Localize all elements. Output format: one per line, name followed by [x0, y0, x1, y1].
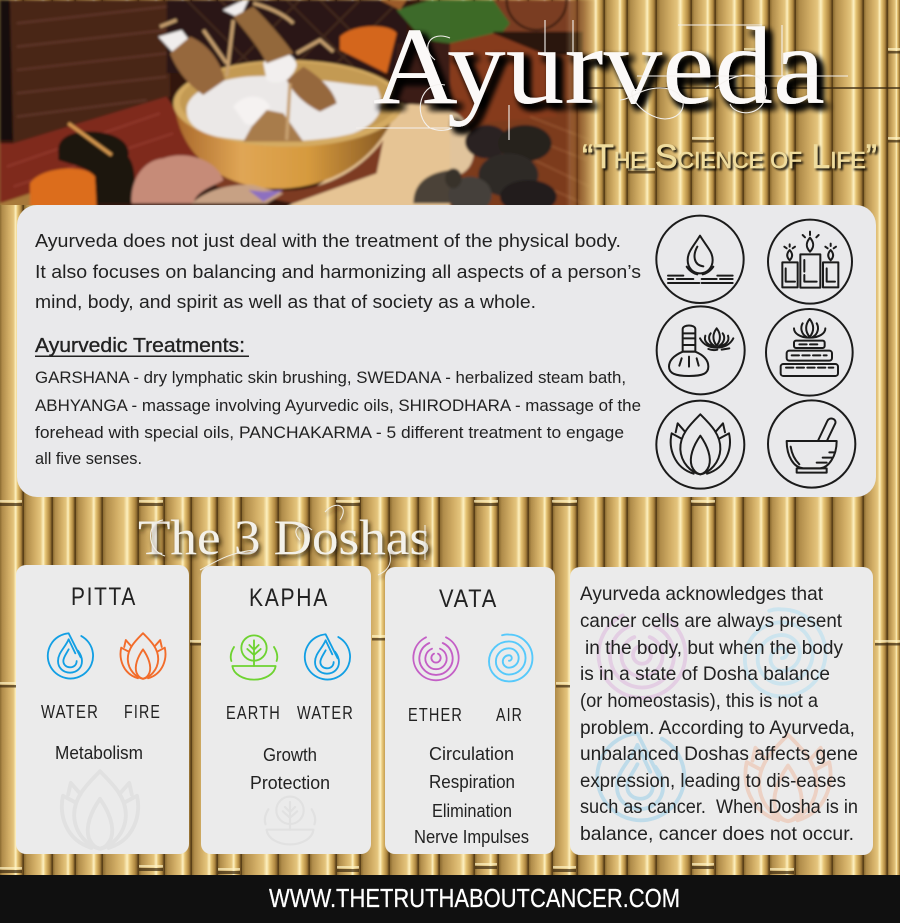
- element labels: FIRE: [124, 701, 161, 722]
- Kapha functions: [250, 744, 330, 793]
- icon: candles: [768, 220, 852, 304]
- panel: introduction and treatments: [17, 205, 876, 497]
- element labels: WATER: [41, 701, 99, 722]
- title: Ayurveda: Ayurveda: [373, 5, 825, 127]
- paragraph: problem. According to Ayurveda,: [580, 717, 855, 739]
- icon: water: [48, 633, 93, 679]
- intro paragraph: [35, 230, 641, 312]
- element labels: [408, 704, 523, 725]
- icon: oil drop: [656, 216, 744, 303]
- watermark: earth: [265, 797, 315, 844]
- icon: water: [305, 634, 350, 680]
- paragraph: (or homeostasis), this is not a: [580, 690, 818, 712]
- Pitta title: PITTA: [71, 583, 137, 611]
- element labels: EARTH: [226, 702, 281, 723]
- icon: mortar and pestle: [768, 400, 855, 488]
- intro paragraph: Ayurveda does not just deal with the treatment of the physical body.: [35, 230, 621, 251]
- panel: Pitta: [16, 565, 189, 854]
- intro paragraph: It also focuses on balancing and harmonizing all aspects of a person’s: [35, 261, 641, 282]
- Vata functions: Nerve Impulses: [414, 826, 529, 847]
- icon: ether: [413, 637, 459, 680]
- panel: Kapha: [201, 566, 371, 854]
- footer bar with website: WWW.THETRUTHABOUTCANCER.COM: [269, 883, 680, 913]
- intro paragraph: mind, body, and spirit as well as that of society as a whole.: [35, 291, 536, 312]
- Kapha title: KAPHA: [249, 584, 329, 612]
- treatments list: [35, 369, 641, 468]
- icon: herbal compress and lotus: [657, 306, 745, 394]
- element labels: ETHER: [408, 704, 463, 725]
- paragraph: is in a state of Dosha balance: [580, 663, 830, 685]
- Vata functions: Circulation: [429, 743, 514, 764]
- icon: lotus: [656, 401, 744, 489]
- footer bar with website: [0, 875, 900, 923]
- paragraph: cancer cells are always present: [580, 610, 843, 632]
- element labels: AIR: [496, 704, 523, 725]
- Pitta function: Metabolism: [55, 742, 143, 763]
- panel: cancer and Dosha balance: [570, 567, 873, 855]
- paragraph: [580, 583, 858, 845]
- watermark: four element icons: [597, 609, 831, 821]
- treatments list: forehead with special oils, PANCHAKARMA - 5 different treatment to engage: [35, 424, 624, 442]
- header photo: spa still life: [0, 0, 600, 213]
- treatments list: GARSHANA - dry lymphatic skin brushing, SWEDANA - herbalized steam bath,: [35, 369, 626, 387]
- paragraph: balance, cancer does not occur.: [580, 823, 854, 845]
- paragraph: expression, leading to dis-eases: [580, 770, 846, 792]
- paragraph: in the body, but when the body: [585, 637, 843, 659]
- icon: air: [489, 634, 532, 681]
- paragraph: such as cancer. When Dosha is in: [580, 796, 858, 818]
- treatments list: all five senses.: [35, 450, 142, 468]
- Vata title: VATA: [439, 585, 498, 613]
- panel: Vata: [385, 567, 555, 854]
- element labels: [41, 701, 161, 722]
- icon: fire: [121, 633, 165, 679]
- paragraph: unbalanced Doshas affects gene: [580, 743, 858, 765]
- element labels: [226, 702, 354, 723]
- icon: earth: [231, 635, 277, 680]
- Kapha functions: Protection: [250, 772, 330, 793]
- icon: stacked stones with lotus: [766, 309, 853, 396]
- icons: treatment circles: [656, 216, 855, 489]
- treatments list: ABHYANGA - massage involving Ayurvedic oils, SHIRODHARA - massage of the: [35, 397, 641, 415]
- Vata functions: Respiration: [429, 771, 515, 792]
- Kapha functions: Growth: [263, 744, 317, 765]
- heading: The 3 Doshas: The 3 Doshas: [138, 509, 430, 565]
- paragraph: Ayurveda acknowledges that: [580, 583, 824, 605]
- Vata functions: Elimination: [432, 800, 512, 821]
- Vata functions: [414, 743, 529, 847]
- watermark: fire: [62, 771, 138, 849]
- element labels: WATER: [297, 702, 354, 723]
- heading: Ayurvedic Treatments: Ayurvedic Treatments:: [35, 334, 245, 357]
- subtitle: The Science of Life: “THE SCIENCE OF LIFE”: [582, 138, 877, 176]
